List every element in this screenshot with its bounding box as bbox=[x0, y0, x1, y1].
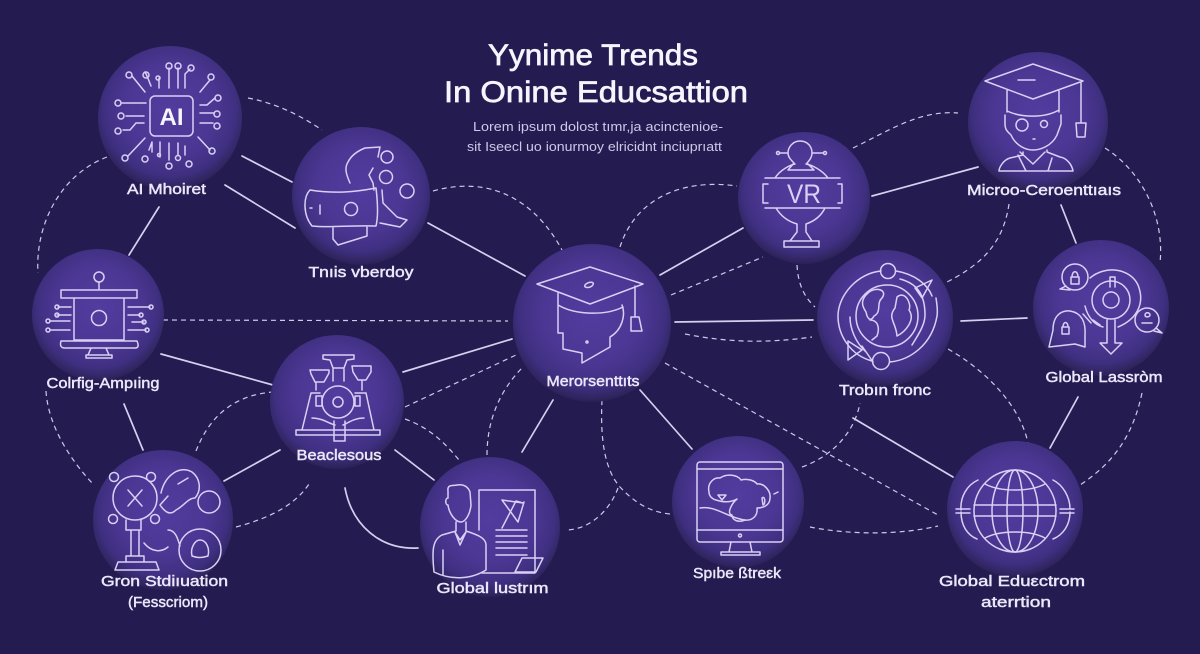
node: Global Lassrom: Global Lassròm bbox=[1046, 370, 1162, 386]
node: Global Education bbox=[939, 441, 1085, 611]
node: Spibe streek: Spıbe ßtreεk bbox=[693, 566, 782, 582]
node: AI: AI Mhoiret bbox=[127, 182, 206, 198]
node: Gron Stdiuation bbox=[93, 450, 233, 611]
icon: wireframe globe bbox=[956, 470, 1074, 552]
icon: VR globe stand bbox=[763, 141, 842, 247]
title bbox=[444, 39, 748, 109]
label: Gron Stdiuation bbox=[101, 574, 228, 611]
icon: globe and bubbles bbox=[108, 470, 221, 571]
node: Global lustrim: Global lustrım bbox=[436, 581, 548, 597]
label: Global Education: Global Eduεctrom bbox=[939, 574, 1085, 590]
node: central graduation: Merorsenttıts bbox=[546, 374, 640, 390]
node: AI bbox=[98, 46, 242, 198]
title: In Onine Educsattion bbox=[444, 76, 748, 109]
label: Global Education: aterrtion bbox=[981, 595, 1051, 611]
node: Config monitor bbox=[32, 249, 164, 392]
icon: globe with orbit bbox=[838, 264, 937, 370]
node: VR bbox=[738, 132, 870, 264]
icon: lab apparatus bbox=[296, 355, 380, 441]
subtitle: Lorem ipsum dolost tımr,ja acinctenioe- bbox=[473, 120, 723, 134]
node: Spibe streek bbox=[672, 436, 804, 582]
icon: speech bubbles and gear bbox=[1049, 264, 1162, 354]
connector network bbox=[38, 98, 1161, 548]
node: Trobin fronc: Trobın fronc bbox=[839, 383, 931, 399]
icon: graduate bbox=[985, 64, 1086, 171]
node: central graduation bbox=[513, 244, 671, 402]
node: VR headset: Tnıis vberdoy bbox=[308, 265, 414, 281]
icon: person with document bbox=[433, 485, 543, 578]
subtitle bbox=[467, 120, 723, 154]
node: Config monitor: Colrfig-Ampıing bbox=[46, 376, 160, 392]
node: Micro-Credentials: Microo-Ceroenttıaıs bbox=[967, 183, 1121, 199]
node: AI: AI bbox=[160, 104, 184, 131]
node: Micro-Credentials bbox=[967, 52, 1121, 199]
icon: AI chip bbox=[115, 63, 221, 169]
node: Global lustrim bbox=[420, 457, 560, 597]
title: Yynime Trends bbox=[488, 39, 698, 72]
node: Beaclesous bbox=[270, 335, 404, 469]
node: Trobin fronc bbox=[817, 250, 953, 399]
node: VR: VR bbox=[787, 179, 821, 209]
icon: monitor with cloud map bbox=[697, 462, 783, 555]
icon: graduation head bbox=[537, 267, 643, 363]
subtitle: sit Iseecl uo ionurmoy elricidnt inciuprıatt bbox=[467, 140, 723, 154]
label: Gron Stdiuation: Gron Stdiıuation bbox=[101, 574, 228, 590]
node: Global Lassrom bbox=[1033, 240, 1169, 386]
node: Beaclesous: Beaclesous bbox=[296, 448, 382, 464]
label: Gron Stdiuation: (Fesscriom) bbox=[128, 595, 208, 611]
icon: monitor with chip bbox=[46, 272, 153, 358]
icon: headset head bbox=[305, 147, 414, 245]
node: VR headset bbox=[292, 127, 430, 281]
label: Global Education bbox=[939, 574, 1085, 611]
